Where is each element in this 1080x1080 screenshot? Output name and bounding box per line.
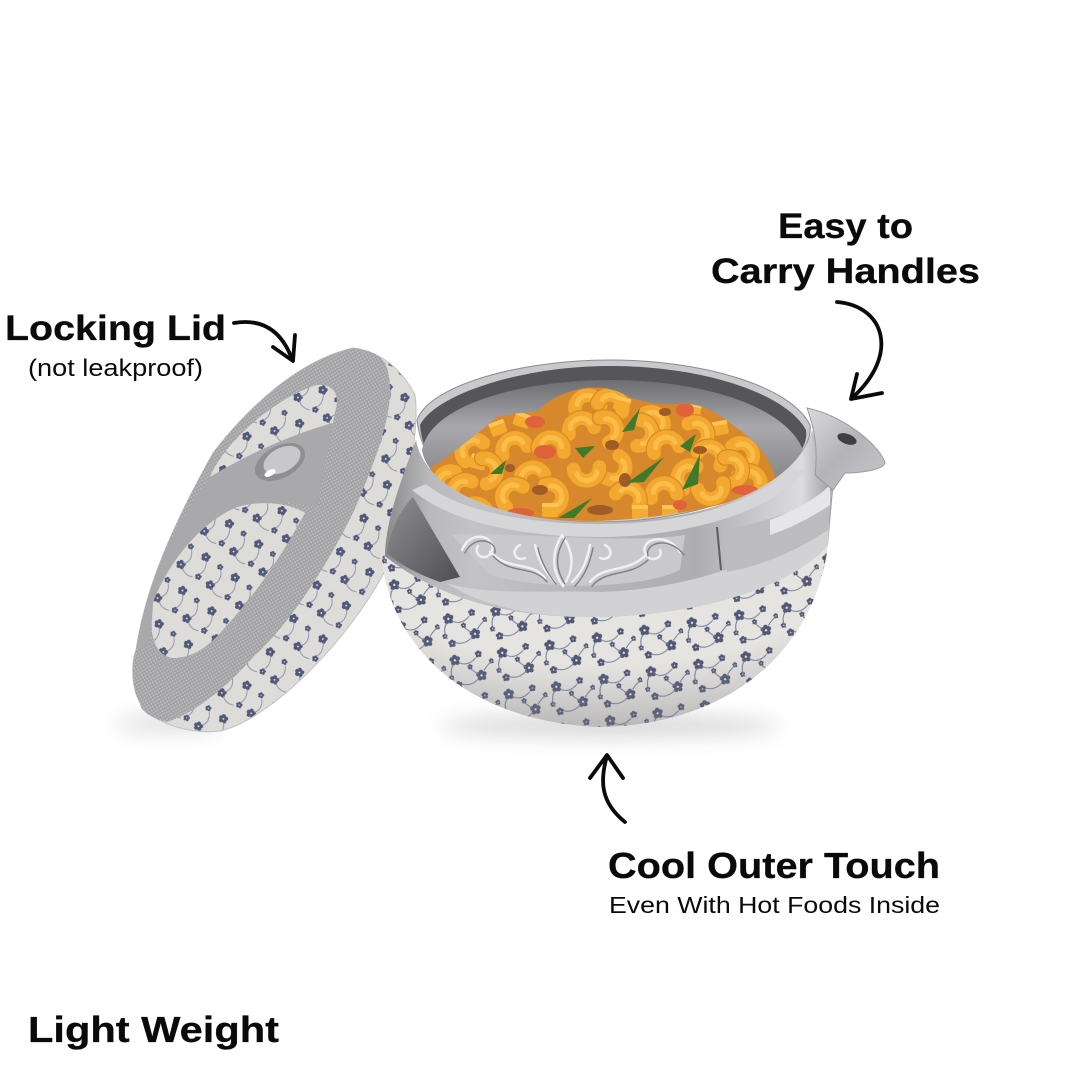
lid upper floral panel <box>210 385 337 477</box>
band lip highlight <box>412 470 806 537</box>
left dark wedge <box>387 497 460 582</box>
product: bowl <box>382 360 885 727</box>
macaroni and sauce <box>434 391 765 519</box>
tomato and meat bits <box>506 403 758 518</box>
lid floral rim <box>133 348 416 732</box>
callout: locking lid <box>5 309 295 382</box>
bowl body shading <box>382 545 828 727</box>
arrow: to lid <box>234 322 295 361</box>
heading: easy to carry handles: Carry Handles <box>711 252 980 291</box>
parsley <box>490 408 700 518</box>
note: not leakproof: (not leakproof) <box>28 355 203 382</box>
heading: easy to carry handles <box>711 207 980 291</box>
lid silver textured ring <box>133 348 390 722</box>
callout: cool outer touch <box>590 755 940 918</box>
lid lower floral panel <box>152 503 305 658</box>
handle <box>807 408 885 490</box>
infographic canvas <box>7 213 978 1050</box>
arrow: to bowl <box>590 755 625 822</box>
heading: easy to carry handles: Easy to <box>778 207 913 246</box>
note: even with hot foods inside: Even With Hot Foods Inside <box>609 892 940 918</box>
bowl floral body <box>382 545 828 727</box>
ground shadow <box>115 715 780 737</box>
callout: easy to carry handles <box>711 207 980 399</box>
silver band <box>385 430 833 617</box>
lid centre silver band <box>138 423 333 649</box>
heading: cool outer touch: Cool Outer Touch <box>608 845 940 886</box>
arrow: to handle <box>837 302 882 399</box>
right band highlights <box>722 490 832 572</box>
label: light weight: Light Weight <box>28 1009 279 1050</box>
embossed scrollwork <box>452 534 685 586</box>
lid knob <box>249 435 311 489</box>
product: lid <box>133 348 416 732</box>
food: pasta <box>420 385 780 525</box>
band lower strip <box>446 520 829 617</box>
bowl rim and inner wall <box>417 360 810 522</box>
heading: locking lid: Locking Lid <box>5 309 226 348</box>
